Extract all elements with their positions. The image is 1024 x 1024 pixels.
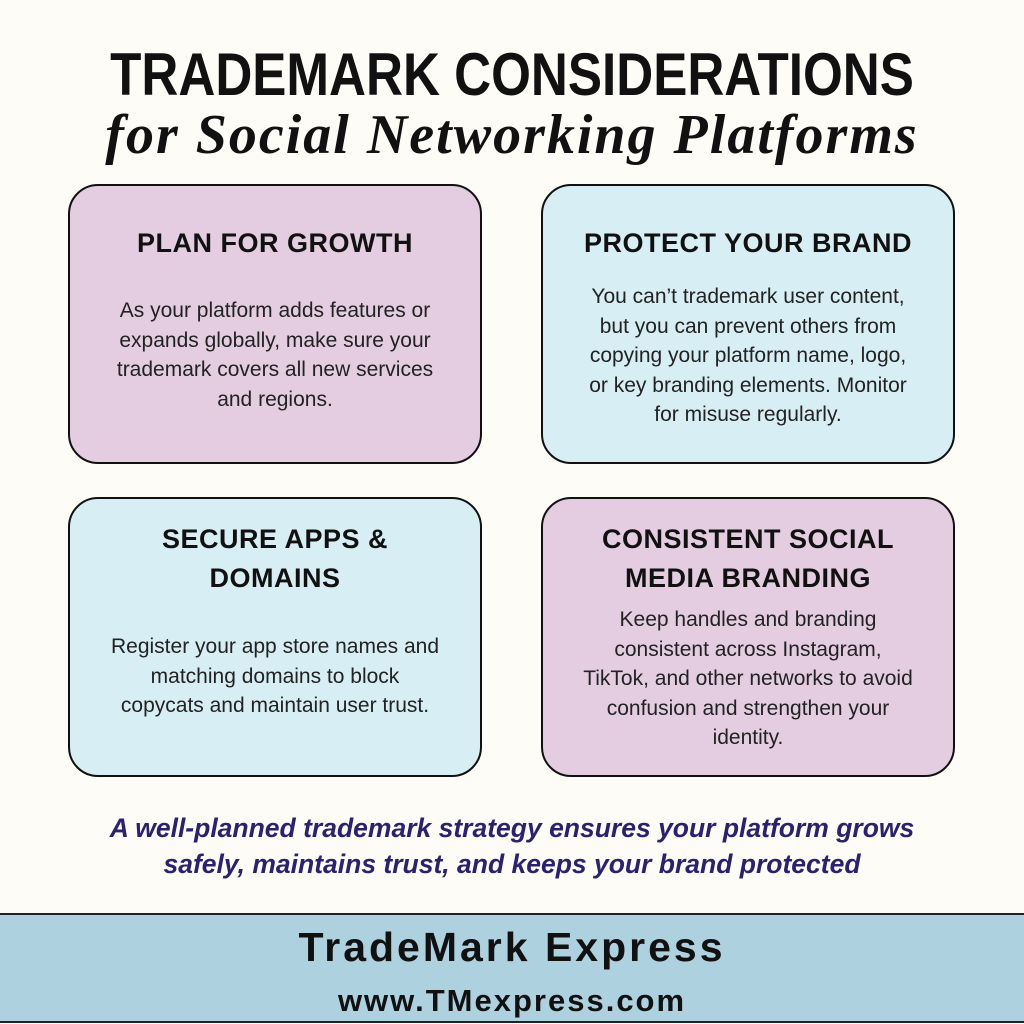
closing statement bbox=[109, 813, 914, 879]
text: consistent branding: TikTok, and other networks to avoid bbox=[583, 667, 913, 690]
heading: secure apps: SECURE APPS & bbox=[162, 524, 388, 554]
heading: consistent branding: MEDIA BRANDING bbox=[625, 563, 871, 593]
text: protect your brand: for misuse regularly. bbox=[654, 403, 842, 426]
text: protect your brand: copying your platform name, logo, bbox=[590, 344, 906, 367]
text: plan for growth: expands globally, make sure your bbox=[119, 328, 431, 352]
closing statement: safely, maintains trust, and keeps your brand protected bbox=[163, 849, 861, 879]
text: secure apps bbox=[111, 635, 439, 717]
text: consistent branding bbox=[583, 608, 913, 749]
subtitle: for Social Networking Platforms bbox=[105, 104, 919, 166]
text: consistent branding: confusion and strengthen your bbox=[607, 696, 889, 720]
text: consistent branding: Keep handles and branding bbox=[620, 608, 876, 631]
heading: consistent branding: CONSISTENT SOCIAL bbox=[602, 524, 894, 554]
panel: consistent branding bbox=[541, 497, 955, 777]
footer bbox=[0, 913, 1024, 1023]
text: secure apps: copycats and maintain user trust. bbox=[121, 694, 429, 717]
text: protect your brand bbox=[589, 285, 907, 426]
panel: protect your brand bbox=[541, 184, 955, 464]
heading: consistent branding bbox=[602, 524, 894, 593]
text: secure apps: Register your app store names and bbox=[111, 635, 439, 658]
text: protect your brand: You can’t trademark user content, bbox=[591, 285, 905, 308]
title: TRADEMARK CONSIDERATIONS bbox=[110, 41, 914, 108]
heading: plan for growth: PLAN FOR GROWTH bbox=[137, 228, 413, 258]
text: plan for growth: As your platform adds features or bbox=[120, 299, 430, 322]
text: plan for growth: and regions. bbox=[217, 388, 333, 410]
footer brand: TradeMark Express bbox=[298, 924, 726, 970]
text: plan for growth: trademark covers all new services bbox=[117, 358, 433, 381]
text: secure apps: matching domains to block bbox=[151, 664, 399, 688]
panel: plan for growth bbox=[68, 184, 482, 464]
text: protect your brand: or key branding elements. Monitor bbox=[589, 374, 907, 396]
closing statement: A well-planned trademark strategy ensures your platform grows bbox=[110, 813, 914, 843]
text: consistent branding: identity. bbox=[713, 726, 783, 749]
heading: protect your brand: PROTECT YOUR BRAND bbox=[584, 228, 912, 258]
text: consistent branding: consistent across Instagram, bbox=[614, 638, 882, 660]
panel: secure apps bbox=[68, 497, 482, 777]
text: plan for growth bbox=[117, 299, 433, 410]
heading: secure apps bbox=[162, 524, 388, 593]
heading: secure apps: DOMAINS bbox=[210, 563, 340, 593]
text: protect your brand: but you can prevent others from bbox=[600, 314, 896, 338]
footer url: www.TMexpress.com bbox=[338, 983, 686, 1018]
